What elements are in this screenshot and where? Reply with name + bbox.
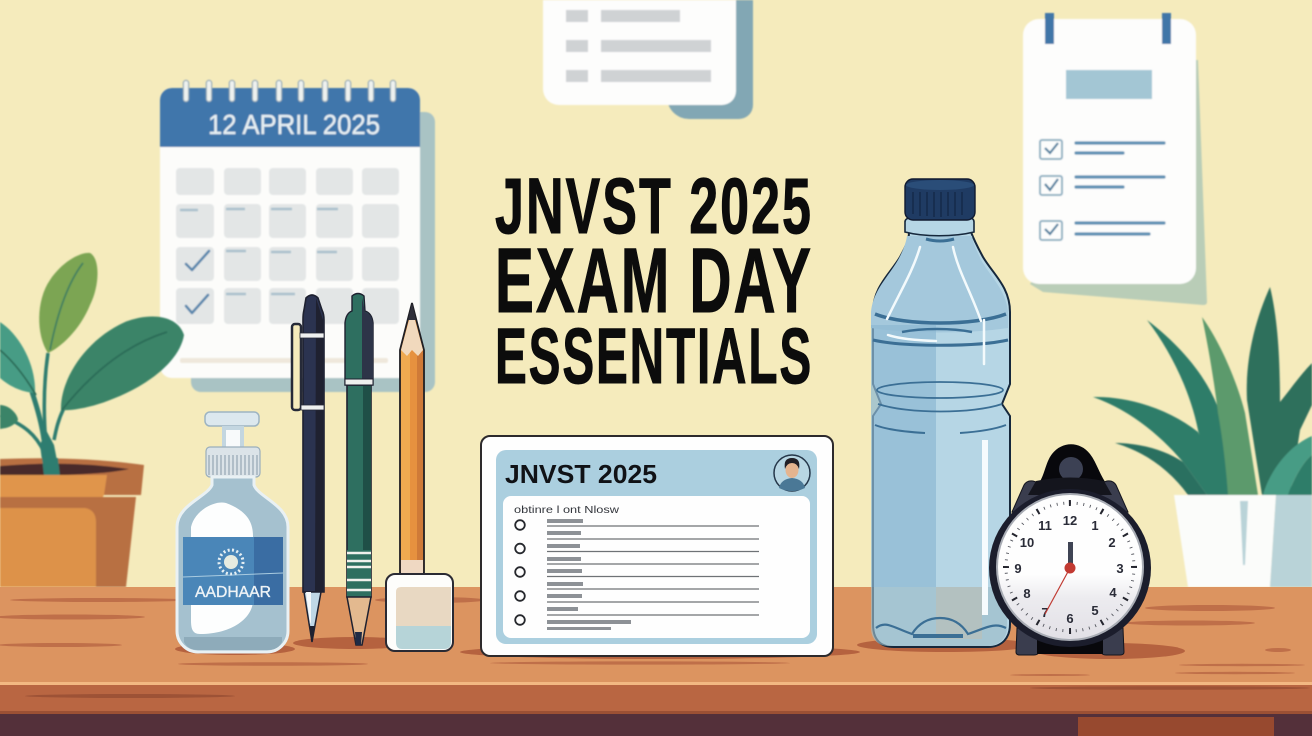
icon: AADHAAR bottle: AADHAAR xyxy=(195,584,271,601)
panel: admit card xyxy=(481,436,833,656)
panel: wooden table xyxy=(0,587,1312,736)
icon: AADHAAR bottle xyxy=(177,412,288,652)
icon: alarm clock: 8 xyxy=(1023,586,1031,601)
title xyxy=(495,161,813,400)
icon: alarm clock: 9 xyxy=(1014,561,1022,576)
panel: wall calendar xyxy=(160,83,435,392)
icon: alarm clock xyxy=(989,444,1151,655)
icon: alarm clock: 6 xyxy=(1066,611,1074,626)
icon: alarm clock: 4 xyxy=(1109,585,1117,600)
panel: top paper note xyxy=(543,0,753,119)
card heading: JNVST 2025 xyxy=(505,459,657,489)
plant: right potted aloe xyxy=(1093,287,1312,587)
card photo xyxy=(774,455,810,491)
card list lines xyxy=(547,519,759,630)
icon: green pen xyxy=(345,294,373,645)
icon: water bottle xyxy=(871,179,1010,647)
title: ESSENTIALS xyxy=(495,311,813,400)
icon: alarm clock: 7 xyxy=(1041,605,1049,620)
icon: alarm clock: 10 xyxy=(1020,535,1034,550)
icon: alarm clock: 11 xyxy=(1038,518,1052,533)
icon: alarm clock: 5 xyxy=(1091,603,1099,618)
icon: alarm clock: 3 xyxy=(1116,561,1124,576)
icon: black pen xyxy=(292,295,324,642)
icon: pencil and eraser xyxy=(386,303,453,651)
icon: alarm clock: 2 xyxy=(1108,535,1116,550)
title: JNVST 2025 xyxy=(495,161,813,250)
plant: left potted plant xyxy=(0,253,184,587)
card subheading: obtinre l ont Nlosw xyxy=(514,505,620,516)
card list bullets xyxy=(515,520,525,625)
panel: pinned checklist xyxy=(1023,13,1207,305)
title: EXAM DAY xyxy=(495,230,813,332)
panel: wall calendar: 12 APRIL 2025 xyxy=(208,109,380,140)
icon: alarm clock: 12 xyxy=(1063,513,1077,528)
icon: alarm clock: 1 xyxy=(1091,518,1099,533)
